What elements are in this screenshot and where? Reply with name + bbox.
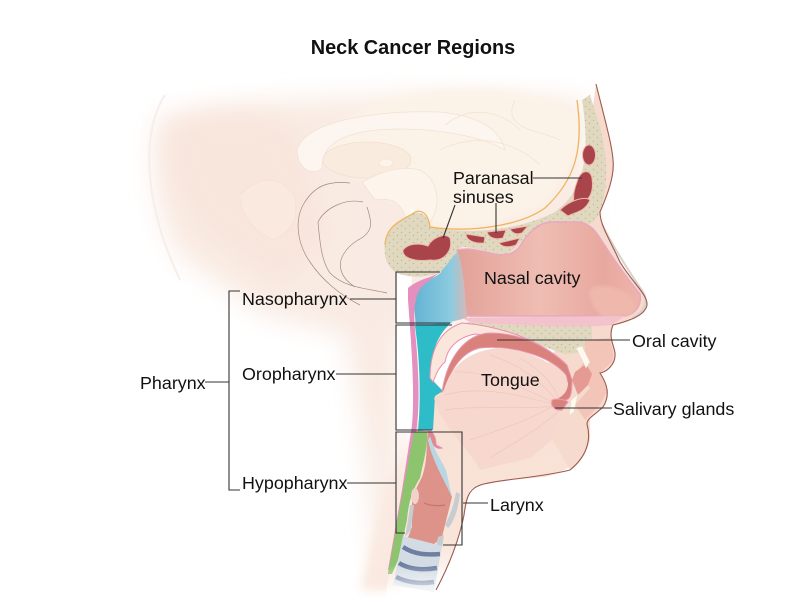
nostril wing xyxy=(589,286,635,318)
nasal cavity xyxy=(457,222,640,316)
label: Oral cavity: Oral cavity xyxy=(632,331,717,351)
label: Oropharynx: Oropharynx xyxy=(242,364,336,384)
light blue laryngeal lining xyxy=(428,436,452,497)
pink floor of nose xyxy=(462,316,625,326)
trachea xyxy=(385,536,445,600)
neck contour fade xyxy=(360,432,412,590)
neck and jaw skin xyxy=(385,353,590,590)
cerebellum xyxy=(240,180,296,240)
tongue xyxy=(434,348,568,470)
label: Nasopharynx: Nasopharynx xyxy=(242,289,347,309)
title: Neck Cancer Regions xyxy=(311,37,515,59)
larynx xyxy=(407,432,452,545)
bone band xyxy=(385,95,606,277)
skin outline xyxy=(436,84,647,590)
label: Nasal cavity: Nasal cavity xyxy=(484,268,580,288)
skull edge line xyxy=(149,95,180,280)
label: Salivary glands: Salivary glands xyxy=(613,399,734,419)
label: Larynx: Larynx xyxy=(490,495,544,515)
darker back wash xyxy=(168,113,330,285)
sinuses xyxy=(403,145,596,261)
nasopharynx blue xyxy=(413,252,467,328)
label: Tongue: Tongue xyxy=(481,370,540,390)
brain xyxy=(297,89,578,232)
pink pharynx back wall xyxy=(388,272,440,570)
larynx fold xyxy=(424,503,445,506)
white gap behind pharynx xyxy=(397,272,416,432)
epiglottis xyxy=(428,432,442,448)
label lines xyxy=(205,178,630,545)
face skin xyxy=(460,84,647,470)
nose outer highlight xyxy=(602,224,646,318)
soft palate xyxy=(430,323,565,382)
label: Pharynx: Pharynx xyxy=(140,373,206,393)
oropharynx teal xyxy=(415,322,452,431)
label: Hypopharynx: Hypopharynx xyxy=(242,473,347,493)
head illustration xyxy=(149,84,647,600)
back of head wash xyxy=(154,96,590,585)
cartilages xyxy=(405,488,460,548)
ear and outer contour xyxy=(298,182,387,305)
skull inner orange line xyxy=(385,100,579,245)
red oral band xyxy=(442,333,572,400)
palate bone xyxy=(462,322,592,354)
hypopharynx green xyxy=(388,432,427,574)
label: Paranasal sinuses: sinuses xyxy=(453,187,514,207)
label: Paranasal sinuses: Paranasal xyxy=(453,168,534,188)
lips and teeth xyxy=(552,338,613,420)
